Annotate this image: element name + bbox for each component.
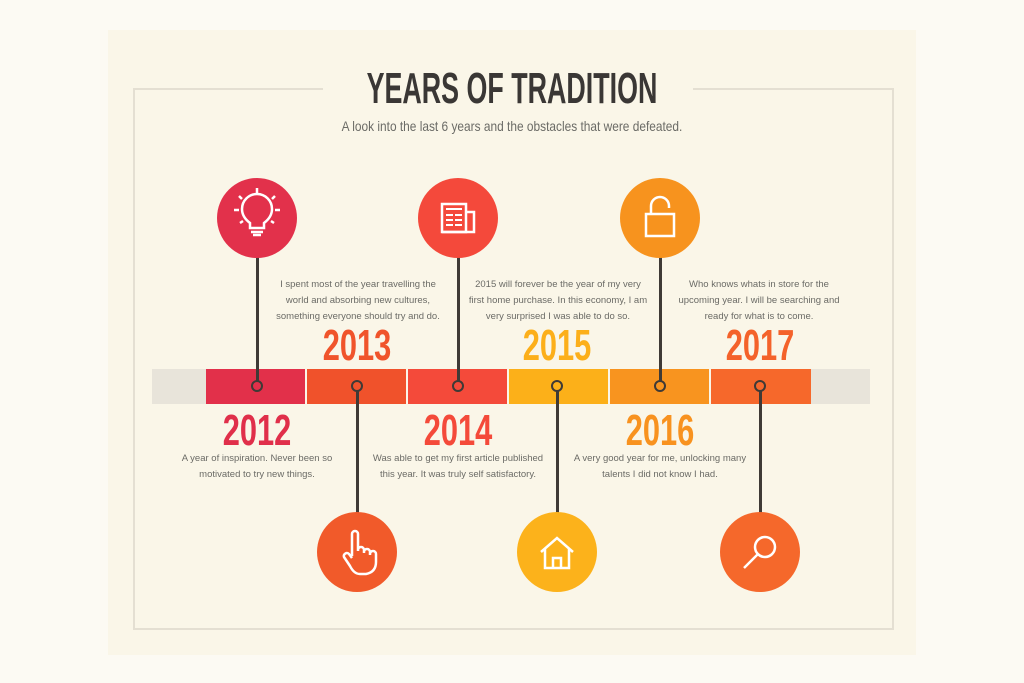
text: something everyone should try and do. <box>276 311 440 322</box>
text: upcoming year. I will be searching and <box>678 295 840 306</box>
text: Was able to get my first article published <box>373 453 543 464</box>
text: 2013 <box>323 321 391 370</box>
title: YEARS OF TRADITION <box>367 64 657 113</box>
text: A very good year for me, unlocking many <box>574 453 746 464</box>
background panel <box>108 30 916 655</box>
text: this year. It was truly self satisfactory. <box>380 469 536 480</box>
subtitle: A look into the last 6 years and the obstacles that were defeated. <box>342 118 682 134</box>
text: 2016 <box>626 406 694 455</box>
text: 2017 <box>726 321 794 370</box>
icon: newspaper 2014 <box>418 178 498 258</box>
icon: lightbulb 2012 <box>217 178 297 258</box>
timeline bar <box>152 369 870 404</box>
text: 2015 will forever be the year of my very <box>475 279 641 290</box>
text: Who knows whats in store for the <box>689 279 829 290</box>
text: talents I did not know I had. <box>602 469 718 480</box>
text: ready for what is to come. <box>705 311 813 322</box>
text blocks <box>182 453 332 480</box>
text: world and absorbing new cultures, <box>286 295 430 306</box>
icon: unlocked padlock 2016 <box>620 178 700 258</box>
text: 2015 <box>523 321 591 370</box>
text blocks: motivated to try new things. <box>199 469 315 480</box>
frame <box>133 88 894 630</box>
text: 2014 <box>424 406 492 455</box>
text: very surprised I was able to do so. <box>486 311 630 322</box>
icon: magnifier 2017 <box>720 512 800 592</box>
text: first home purchase. In this economy, I am <box>469 295 647 306</box>
dots <box>251 380 263 392</box>
icon: house 2015 <box>517 512 597 592</box>
text blocks: A year of inspiration. Never been so <box>182 453 332 464</box>
stems <box>256 255 259 382</box>
icon: hand pointer 2013 <box>317 512 397 592</box>
years: 2012 <box>223 406 291 455</box>
text: I spent most of the year travelling the <box>280 279 436 290</box>
